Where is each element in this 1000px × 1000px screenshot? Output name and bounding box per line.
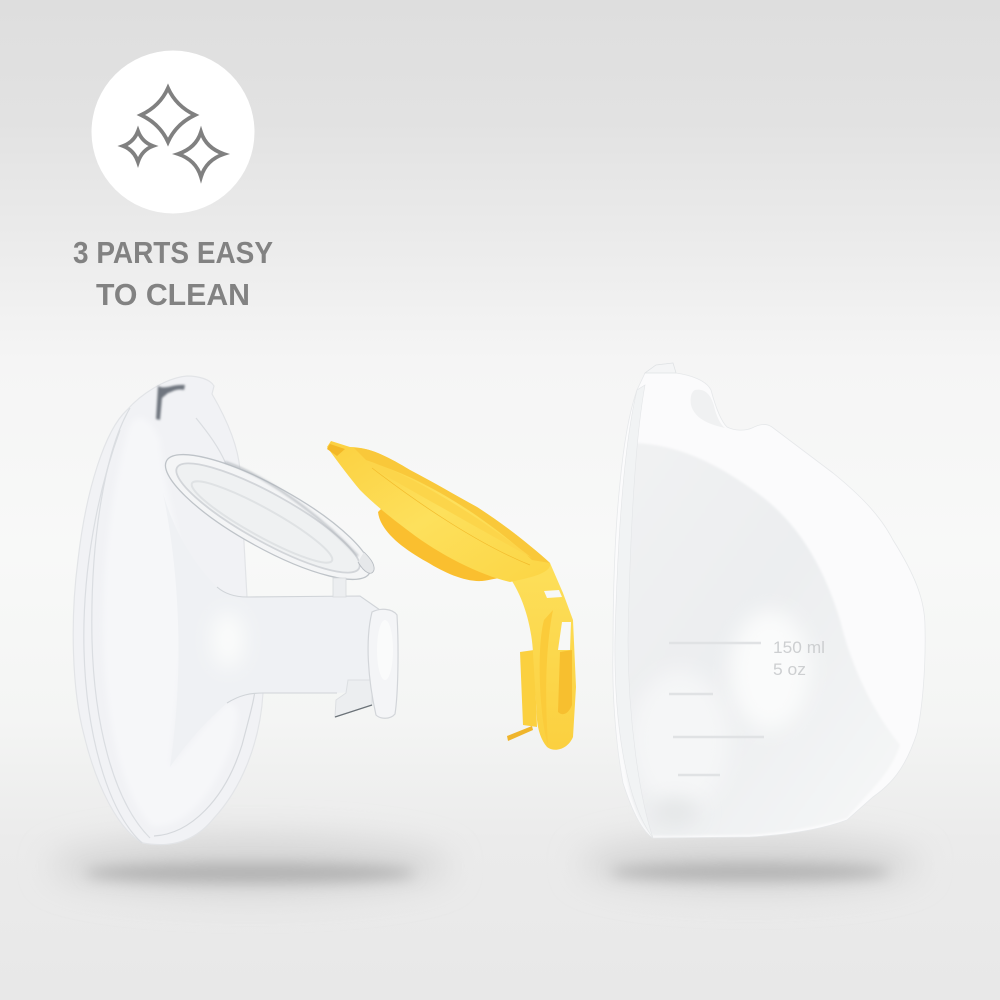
part: milk collection cup — [613, 363, 925, 838]
arm pin — [507, 726, 533, 741]
heading: 3 PARTS EASY — [73, 235, 273, 270]
arm clip plate — [520, 650, 537, 727]
arm window — [558, 650, 572, 714]
small slot — [544, 590, 562, 598]
disc rim — [354, 448, 550, 563]
arm — [510, 563, 576, 750]
measurement lines — [669, 643, 764, 775]
front rim — [615, 385, 653, 838]
floor shadow: left part — [50, 836, 450, 896]
funnel opening ring — [152, 434, 384, 600]
flange inner soft fill — [103, 418, 237, 826]
flange body — [73, 376, 263, 845]
end ring — [368, 609, 398, 718]
floor shadow: right part — [580, 836, 920, 892]
measurement text: 150 ml — [773, 639, 825, 657]
cup outline — [613, 363, 925, 838]
stem connector — [333, 578, 346, 597]
valve tab — [335, 680, 372, 717]
disc — [327, 441, 550, 582]
membrane bulge — [378, 490, 505, 581]
lower haze — [651, 798, 699, 826]
flange rim lines — [84, 408, 255, 843]
heading: TO CLEAN — [96, 277, 250, 312]
part: yellow membrane — [327, 441, 576, 750]
tube — [163, 493, 385, 767]
liquid zone / inner body — [616, 443, 900, 836]
measurement text: 5 oz — [773, 661, 806, 679]
measurement text — [773, 639, 825, 679]
heading — [73, 235, 273, 312]
soft white glow — [730, 610, 810, 730]
tab — [645, 363, 676, 373]
dark notch at top — [156, 385, 185, 420]
top pocket — [691, 390, 725, 428]
part: breast shield (clear flange) — [73, 376, 398, 845]
icon badge: sparkles — [92, 50, 254, 214]
